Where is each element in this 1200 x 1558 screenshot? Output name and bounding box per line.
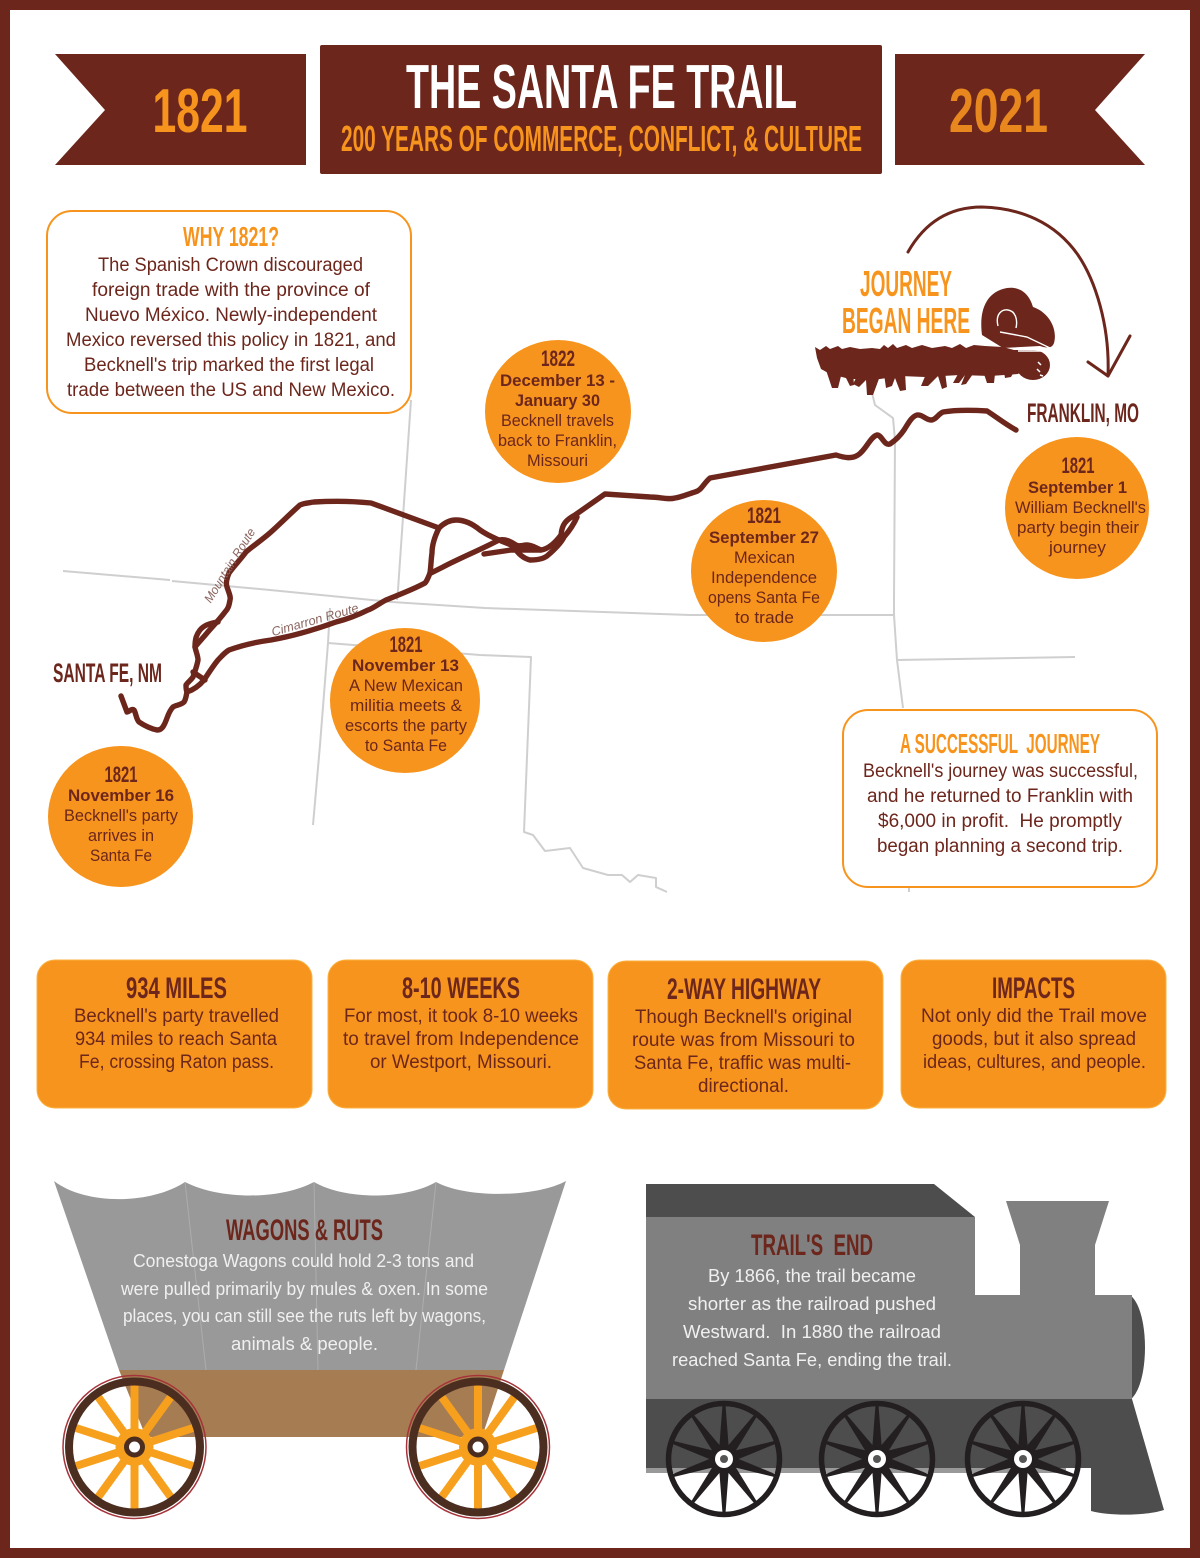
- lower strip: [646, 1468, 1066, 1473]
- train text: reached Santa Fe, ending the trail.: [672, 1349, 952, 1370]
- card: 934 miles: Fe, crossing Raton pass.: [79, 1052, 274, 1073]
- timeline: 1822 December 13: January 30: [515, 392, 600, 410]
- callout: why 1821: [47, 211, 411, 413]
- card: 8-10 weeks: 8-10 WEEKS: [402, 972, 520, 1005]
- train text: By 1866, the trail became: [708, 1265, 916, 1286]
- timeline: 1821 November 13: to Santa Fe: [365, 737, 447, 755]
- wagon text: were pulled primarily by mules & oxen. In some: [120, 1278, 488, 1299]
- timeline: 1822 December 13: back to Franklin,: [498, 432, 617, 450]
- timeline: 1822 December 13: 1822: [541, 346, 575, 371]
- timeline: 1821 September 27: Independence: [711, 569, 817, 587]
- wagon text: places, you can still see the ruts left by wagons,: [123, 1305, 486, 1326]
- wagon text: animals & people.: [231, 1333, 378, 1354]
- train text: shorter as the railroad pushed: [688, 1293, 936, 1314]
- card: 2-way highway: [608, 961, 883, 1109]
- callout: a successful journey: and he returned to Franklin with: [867, 786, 1133, 807]
- card: impacts: Not only did the Trail move: [921, 1006, 1147, 1027]
- map: trail routes: [121, 410, 1016, 730]
- banner: 2021: 2021: [949, 77, 1048, 146]
- illustration: locomotive: [646, 1184, 1164, 1515]
- timeline: 1821 November 13: 1821: [390, 632, 422, 657]
- timeline: 1821 November 16: [48, 746, 193, 887]
- timeline: 1821 November 16: 1821: [104, 762, 138, 787]
- card: 934 miles: [37, 960, 312, 1108]
- timeline: 1821 November 16: November 16: [68, 787, 174, 805]
- wagon text: Conestoga Wagons could hold 2-3 tons and: [133, 1250, 474, 1271]
- map: cimarron route: [121, 573, 430, 730]
- map label: cimarron route: Cimarron Route: [270, 601, 360, 639]
- label: Santa Fe, NM: SANTA FE, NM: [53, 658, 162, 688]
- callout: why 1821: Becknell's trip marked the first legal: [84, 355, 374, 376]
- train front cap: [1130, 1295, 1145, 1400]
- icon: oxen and wagon silhouette: [815, 288, 1055, 395]
- label: journey began here: BEGAN HERE: [842, 300, 970, 341]
- timeline: 1821 September 27: Mexican: [734, 549, 795, 567]
- timeline: 1821 September 1: 1821: [1062, 453, 1094, 478]
- timeline: 1821 September 1: [1005, 437, 1149, 579]
- card: 2-way highway: Though Becknell's original: [635, 1007, 852, 1028]
- timeline: 1822 December 13: [485, 340, 631, 483]
- callout: why 1821: Mexico reversed this policy in 1821, and: [66, 330, 396, 351]
- arrow: to Franklin: [908, 207, 1130, 376]
- timeline: 1821 November 13: escorts the party: [345, 717, 468, 735]
- card: impacts: goods, but it also spread: [932, 1029, 1136, 1050]
- label: journey began here: JOURNEY: [860, 263, 952, 304]
- timeline: 1821 September 27: to trade: [735, 609, 794, 627]
- timeline: 1821 November 13: militia meets &: [350, 697, 462, 715]
- card: 934 miles: 934 MILES: [126, 972, 227, 1005]
- cover seams: [185, 1182, 436, 1370]
- card: 934 miles: 934 miles to reach Santa: [75, 1029, 277, 1050]
- timeline: 1821 September 1: William Becknell's: [1015, 499, 1146, 517]
- card: impacts: IMPACTS: [992, 972, 1075, 1005]
- callout: why 1821: trade between the US and New Mexico.: [67, 380, 395, 401]
- banner: 2021: [895, 54, 1145, 165]
- map label: mountain route: Mountain Route: [201, 526, 258, 605]
- callout: why 1821: WHY 1821?: [183, 221, 279, 252]
- timeline: 1822 December 13: Becknell travels: [501, 412, 614, 430]
- train wheel 3: [968, 1404, 1078, 1514]
- callout: why 1821: The Spanish Crown discouraged: [98, 255, 363, 276]
- train wheel 1: [668, 1404, 780, 1514]
- callout: a successful journey: $6,000 in profit. He promptly: [878, 811, 1122, 832]
- train roof: [646, 1184, 975, 1217]
- train body and stack: [646, 1201, 1132, 1399]
- card: 8-10 weeks: to travel from Independence: [343, 1029, 579, 1050]
- timeline: 1821 September 1: party begin their: [1017, 519, 1140, 537]
- timeline: 1821 November 16: Santa Fe: [90, 847, 152, 865]
- timeline: 1821 September 1: September 1: [1028, 479, 1127, 497]
- banner: title: [320, 45, 882, 174]
- right wagon wheel: [406, 1376, 550, 1518]
- timeline: 1821 November 13: November 13: [352, 657, 459, 675]
- timeline: 1821 November 16: arrives in: [88, 827, 154, 845]
- cowcatcher and lower body: [646, 1399, 1164, 1515]
- timeline: 1821 September 27: September 27: [709, 529, 819, 547]
- card: 934 miles: Becknell's party travelled: [74, 1006, 279, 1027]
- card: impacts: ideas, cultures, and people.: [923, 1052, 1146, 1073]
- label: journey began here: [842, 263, 970, 341]
- card: 2-way highway: directional.: [698, 1076, 789, 1097]
- callout: why 1821: foreign trade with the province of: [92, 280, 371, 301]
- card: 2-way highway: route was from Missouri to: [632, 1030, 855, 1051]
- map: state borders: [63, 393, 1075, 892]
- train text: Westward. In 1880 the railroad: [683, 1321, 941, 1342]
- timeline: 1821 November 13: [330, 628, 480, 773]
- train text: [672, 1265, 952, 1370]
- train heading: TRAIL'S END: [751, 1229, 873, 1262]
- timeline: 1821 November 13: A New Mexican: [349, 677, 463, 695]
- card: 8-10 weeks: or Westport, Missouri.: [370, 1052, 552, 1073]
- card: 2-way highway: Santa Fe, traffic was multi-: [634, 1053, 851, 1074]
- wagon heading: WAGONS & RUTS: [226, 1214, 383, 1247]
- banner: 1821: 1821: [152, 77, 248, 146]
- map: mountain route: [186, 501, 439, 692]
- wagon text: [120, 1250, 488, 1354]
- banner: title: THE SANTA FE TRAIL: [406, 53, 797, 122]
- timeline: 1821 September 27: 1821: [747, 503, 781, 528]
- callout: why 1821: Nuevo México. Newly-independent: [85, 305, 378, 326]
- illustration: conestoga wagon: [54, 1181, 566, 1518]
- card: 2-way highway: 2-WAY HIGHWAY: [667, 973, 821, 1006]
- banner: 1821: [55, 54, 306, 165]
- callout: a successful journey: Becknell's journey was successful,: [863, 761, 1138, 782]
- timeline: 1821 September 27: [691, 500, 837, 642]
- timeline: 1821 November 16: Becknell's party: [64, 807, 179, 825]
- train wheel 2: [822, 1404, 932, 1514]
- timeline: 1822 December 13: December 13 -: [500, 372, 615, 390]
- wagon bed: [119, 1370, 504, 1437]
- callout: a successful journey: [843, 710, 1157, 887]
- timeline: 1822 December 13: Missouri: [527, 452, 588, 470]
- timeline: 1821 September 27: opens Santa Fe: [708, 589, 820, 607]
- card: 8-10 weeks: For most, it took 8-10 weeks: [344, 1006, 578, 1027]
- callout: a successful journey: began planning a second trip.: [877, 836, 1123, 857]
- card: 8-10 weeks: [328, 960, 593, 1108]
- wagon cover: [54, 1181, 566, 1370]
- card: impacts: [901, 960, 1166, 1108]
- timeline: 1821 September 1: journey: [1048, 539, 1107, 557]
- left wagon wheel: [63, 1376, 206, 1518]
